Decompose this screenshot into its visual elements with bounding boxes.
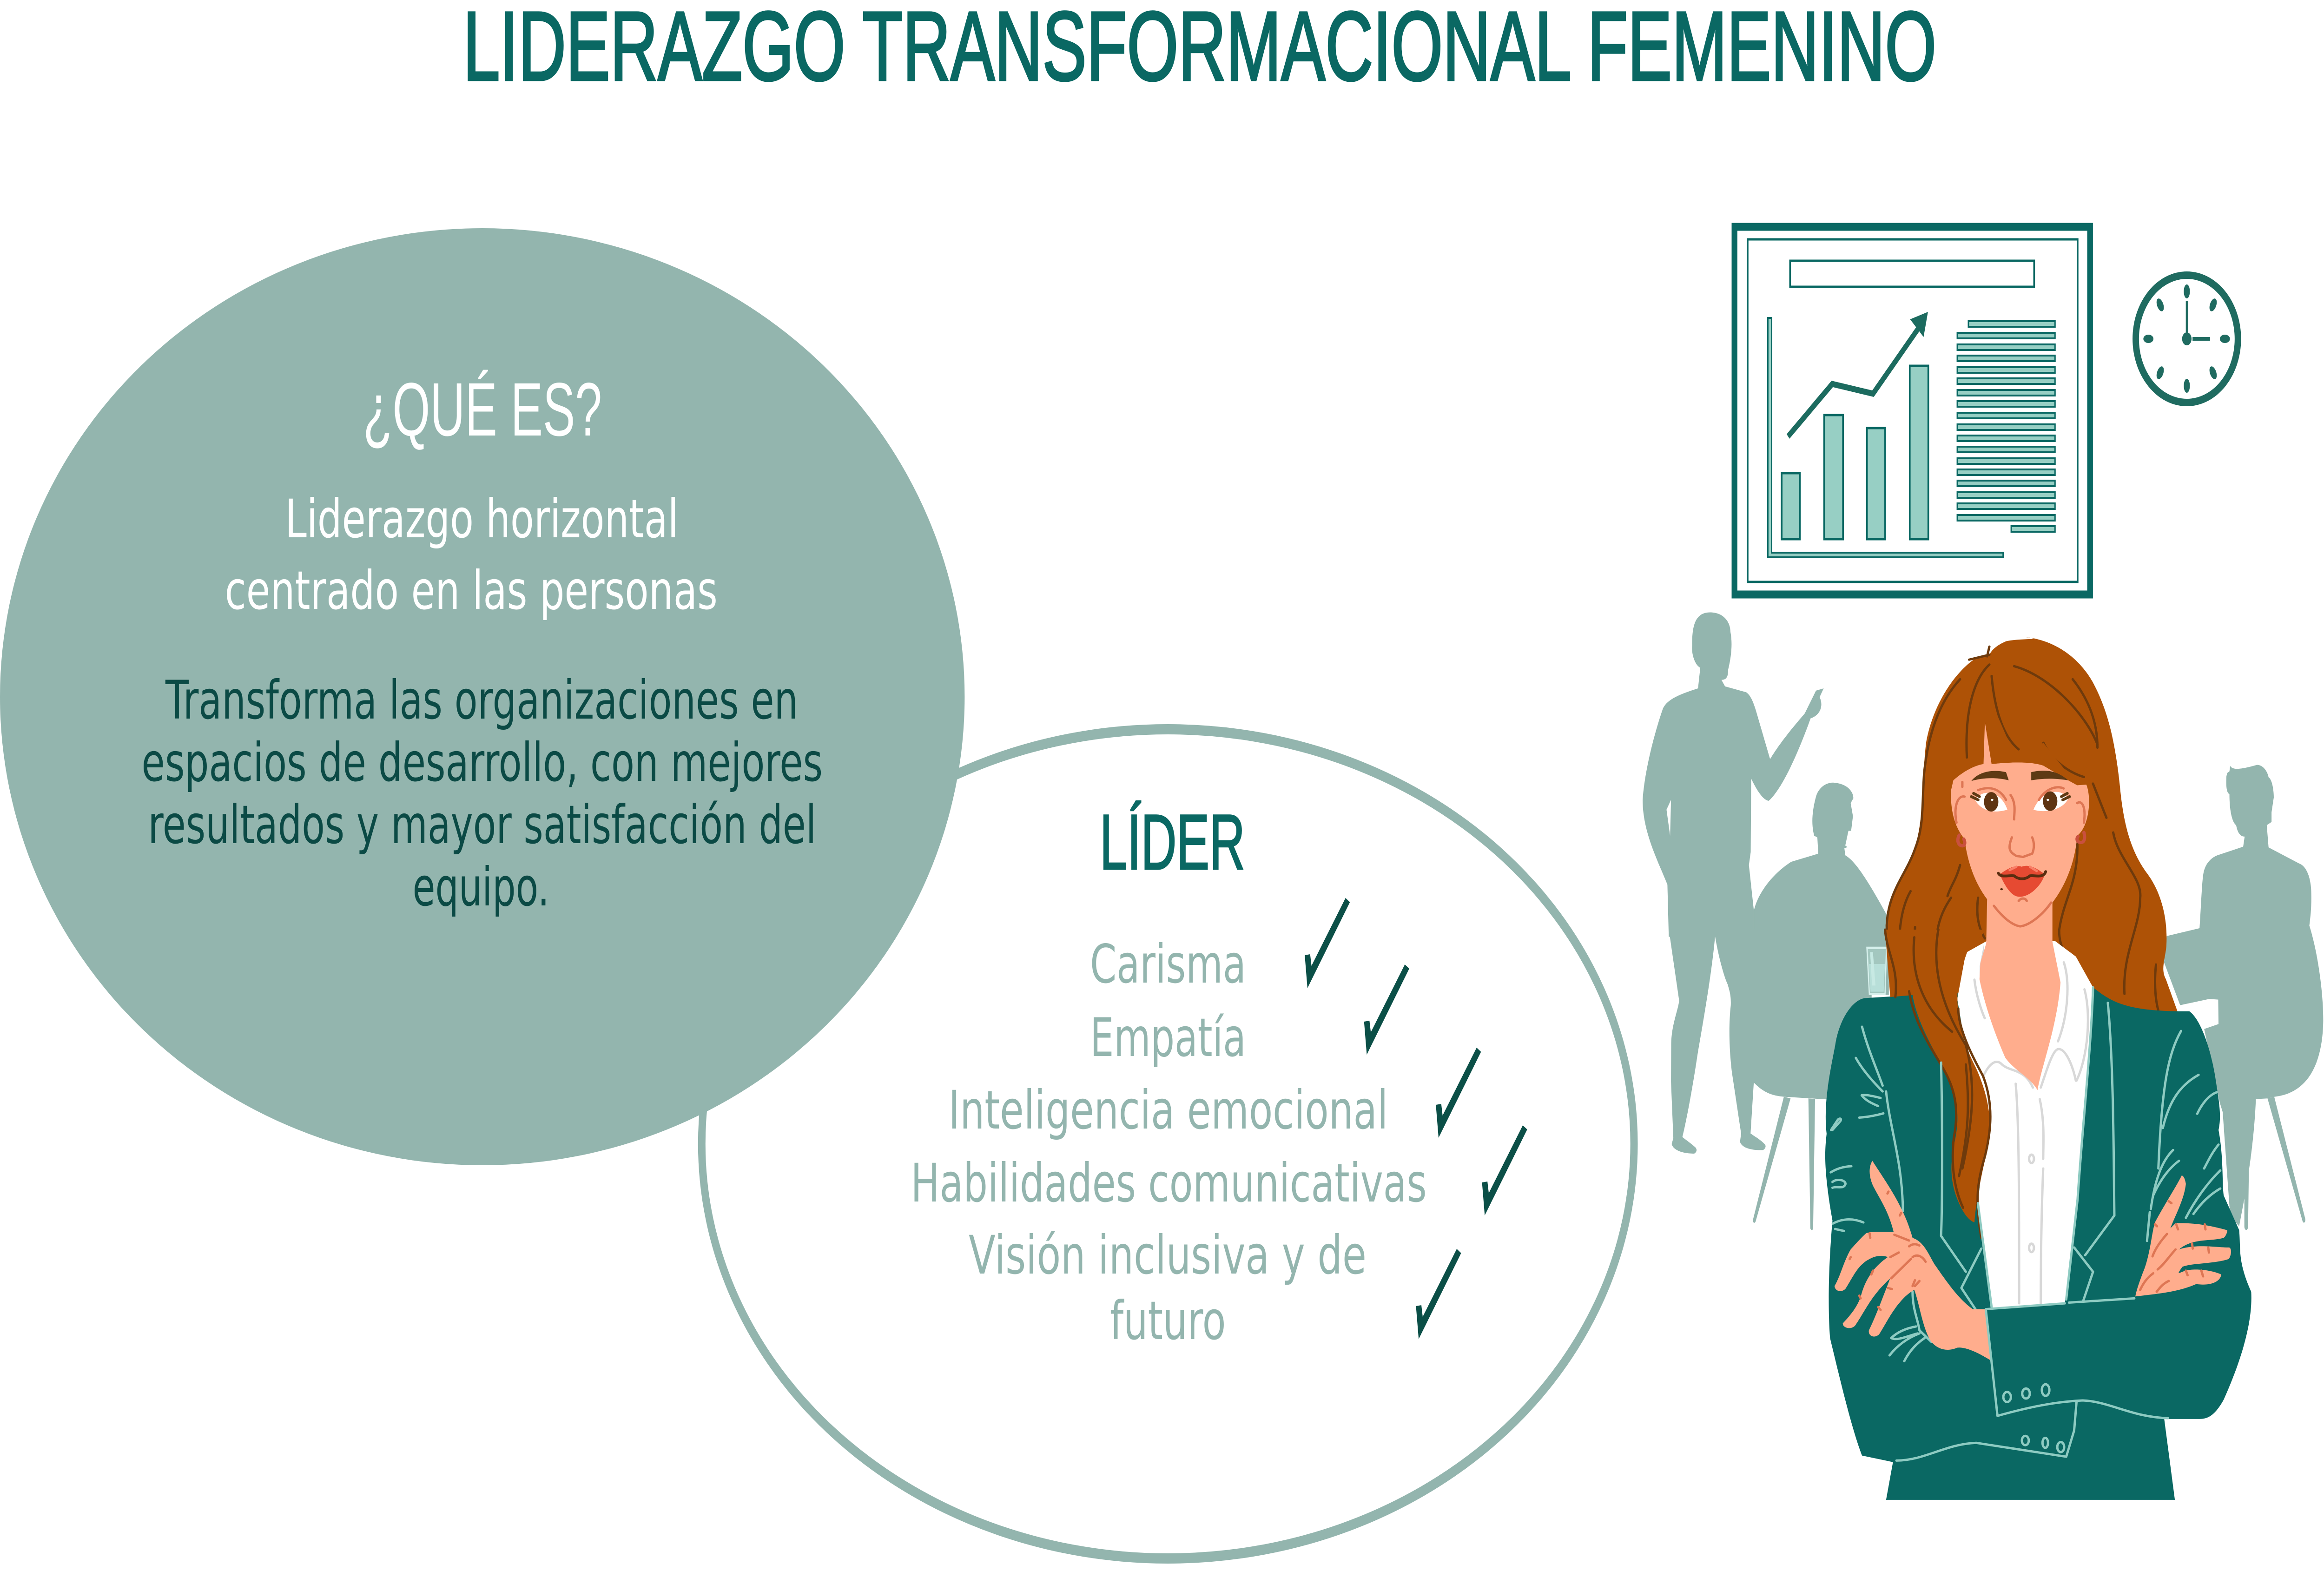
neck and face (1951, 702, 2089, 1090)
jacket lapels and fold lines (1831, 987, 2220, 1361)
text lines (1957, 321, 2055, 532)
definition text (225, 489, 718, 621)
list of qualities: Visión inclusiva y de (969, 1225, 1367, 1286)
list of qualities: Carisma (1090, 934, 1246, 995)
background silhouettes (1643, 613, 2323, 1230)
face lines (1955, 782, 2085, 926)
bang over forehead (1985, 702, 2088, 785)
right hand (2135, 1175, 2231, 1296)
list of qualities: Habilidades comunicativas (911, 1153, 1427, 1214)
white shirt (1957, 941, 2093, 1309)
panel: líder (702, 729, 1634, 1558)
silhouette: standing man legs and chair (1669, 930, 1889, 1230)
lips (2000, 866, 2045, 897)
illustration: woman (1825, 637, 2251, 1500)
description text: resultados y mayor satisfacción del (148, 795, 816, 856)
list of qualities (911, 934, 1427, 1352)
earrings (1958, 832, 2085, 846)
panel: qué es (0, 228, 964, 1165)
definition text: centrado en las personas (225, 561, 718, 621)
icon: presentation board with chart (1735, 227, 2090, 594)
outlined ellipse (702, 729, 1634, 1558)
eyebrows (1971, 771, 2009, 781)
sleeve buttons (2003, 1384, 2064, 1452)
hair lock front (1885, 930, 1990, 1238)
sleeve outlines (1896, 1298, 2168, 1460)
description text: espacios de desarrollo, con mejores (142, 733, 823, 793)
list of qualities: futuro (1110, 1291, 1226, 1352)
eyes (1975, 793, 2007, 812)
description text: Transforma las organizaciones en (165, 670, 798, 731)
silhouette: standing man upper body and seated person (1643, 613, 1906, 963)
jacket details and hands (1831, 987, 2231, 1460)
hair back (1886, 637, 2178, 1012)
icon: glass of water (1866, 947, 1889, 998)
trend arrow (1788, 312, 1928, 436)
description text: equipo. (413, 857, 549, 918)
filled ellipse (0, 228, 964, 1165)
chart axes (1768, 318, 2003, 557)
shirt collar shadow (1980, 945, 1985, 977)
list of qualities: Empatía (1090, 1008, 1246, 1069)
jacket (1825, 941, 2251, 1500)
heading: qué es: ¿QUÉ ES? (363, 367, 602, 452)
heading: líder: LÍDER (1100, 799, 1245, 886)
left hand (1835, 1161, 1991, 1360)
icons: check marks (1305, 898, 1527, 1339)
list of qualities: Inteligencia emocional (949, 1080, 1388, 1141)
definition text: Liderazgo horizontal (285, 489, 679, 550)
bar chart (1782, 366, 1928, 539)
description text (142, 670, 823, 918)
icon: wall clock (2133, 271, 2241, 406)
board frame (1735, 227, 2090, 594)
silhouette: seated person right (2164, 765, 2323, 1230)
